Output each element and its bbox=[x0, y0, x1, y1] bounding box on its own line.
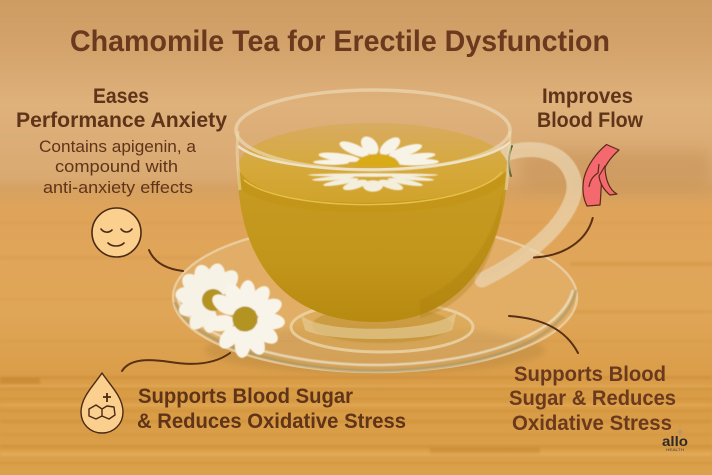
heading: improves blood flow bbox=[537, 85, 644, 132]
callout: blood sugar, left bbox=[81, 353, 406, 433]
callout: improves blood flow bbox=[534, 85, 644, 258]
cup foot bbox=[300, 308, 458, 339]
text: supports blood sugar and oxidative stress: Sugar & Reduces bbox=[509, 387, 676, 410]
title: Chamomile Tea for Erectile Dysfunction bbox=[70, 25, 610, 58]
icon: drop with molecule bbox=[81, 373, 123, 433]
saucer bbox=[173, 222, 577, 374]
tea in bowl bbox=[238, 170, 507, 322]
connector: vessel to cup bbox=[534, 218, 593, 258]
text: supports blood sugar bbox=[137, 385, 406, 433]
icon: calm face bbox=[92, 208, 141, 257]
description: apigenin bbox=[39, 137, 197, 197]
connector: saucer to text bbox=[509, 316, 578, 353]
logo: allo health bbox=[662, 429, 688, 452]
connector: drop to saucer bbox=[122, 353, 230, 371]
heading: improves blood flow: Blood Flow bbox=[537, 109, 644, 132]
logo: allo health: allo bbox=[662, 433, 688, 449]
cup glass rim bbox=[236, 90, 510, 190]
heading: improves blood flow: Improves bbox=[542, 85, 633, 108]
chamomile flower on saucer (front) bbox=[207, 279, 286, 359]
heading: eases performance anxiety: Eases bbox=[93, 85, 149, 108]
text: supports blood sugar and oxidative stress: Supports Blood bbox=[514, 363, 666, 386]
floating chamomile flower bbox=[308, 136, 439, 192]
text: supports blood sugar and oxidative stress: Oxidative Stress bbox=[512, 412, 672, 435]
heading: eases performance anxiety bbox=[16, 85, 227, 132]
description: apigenin: Contains apigenin, a bbox=[39, 137, 197, 156]
logo: allo health: HEALTH bbox=[666, 447, 684, 452]
heading: eases performance anxiety: Performance Anxiety bbox=[16, 109, 227, 132]
chamomile flower on saucer (back) bbox=[174, 262, 243, 333]
callout: blood sugar, right bbox=[509, 316, 676, 435]
illustration: tea cup on glass saucer bbox=[173, 90, 577, 374]
description: apigenin: anti-anxiety effects bbox=[43, 178, 193, 197]
description: apigenin: compound with bbox=[55, 157, 178, 176]
cup handle bbox=[482, 146, 575, 280]
icon: blood vessel bbox=[583, 144, 619, 206]
text: supports blood sugar: Supports Blood Sugar bbox=[138, 385, 353, 408]
callout: eases performance anxiety bbox=[16, 85, 227, 271]
connector: face to flowers bbox=[149, 250, 183, 271]
text: supports blood sugar: & Reduces Oxidative Stress bbox=[137, 410, 406, 433]
text: supports blood sugar and oxidative stress bbox=[509, 363, 676, 435]
